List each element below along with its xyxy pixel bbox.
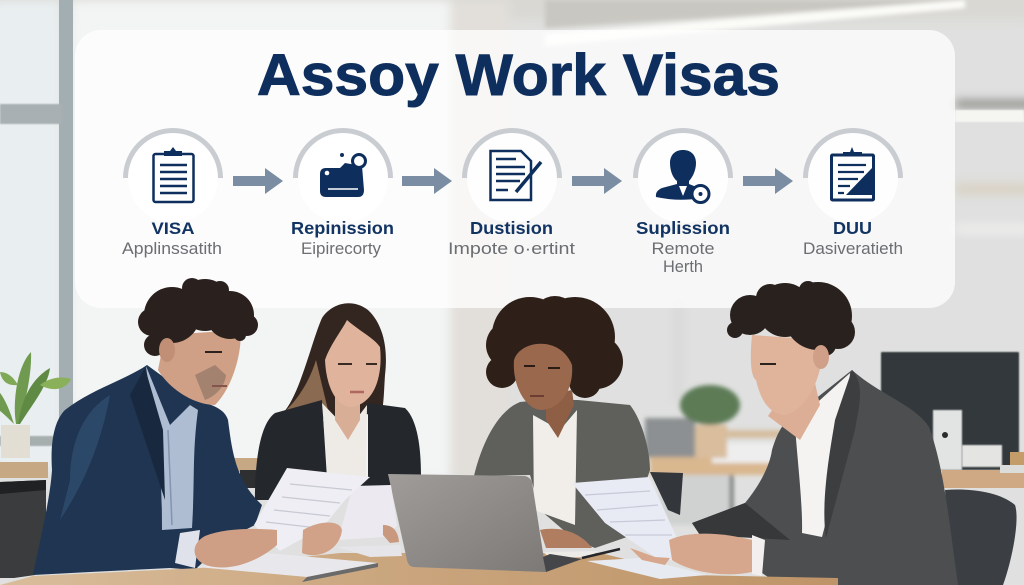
step 5: DUU	[803, 130, 903, 258]
laptop	[388, 474, 582, 572]
step 4: Suplission	[636, 130, 730, 276]
person 4: man in dark grey suit	[692, 281, 958, 585]
background desks, monitor and plants	[0, 352, 1024, 585]
step 3: Dustision: Impote o·ertint	[448, 240, 575, 258]
step 2: Repinission	[291, 130, 394, 258]
step 1: VISA: VISA	[152, 219, 194, 238]
step 4: Suplission: Suplission	[636, 218, 730, 238]
translucent panel	[75, 30, 955, 308]
arrow 4	[743, 168, 793, 194]
step 4: Suplission: Herth	[663, 258, 703, 276]
step 3: Dustision	[448, 130, 575, 258]
step 2: Repinission: Repinission	[291, 218, 394, 238]
documents on the table	[197, 545, 707, 582]
step 5: DUU: DUU	[833, 218, 872, 238]
person 3: woman with curly hair in grey blazer	[474, 296, 650, 548]
step 1: VISA: Applinssatith	[122, 240, 222, 258]
step 1: VISA	[122, 130, 222, 258]
person 2: woman in black blazer	[255, 303, 421, 500]
arrow 3	[572, 168, 622, 194]
person 1: man in navy blazer	[33, 278, 262, 575]
step 5: DUU: Dasiveratieth	[803, 240, 903, 258]
arrow 1	[233, 168, 283, 194]
step 4: Suplission: Remote	[652, 240, 714, 258]
arrow 2	[402, 168, 452, 194]
title: Assoy Work Visas	[257, 43, 780, 108]
step 2: Repinission: Eipirecorty	[301, 240, 382, 258]
table	[0, 553, 838, 585]
step 3: Dustision: Dustision	[470, 218, 553, 238]
papers held up	[195, 468, 752, 574]
